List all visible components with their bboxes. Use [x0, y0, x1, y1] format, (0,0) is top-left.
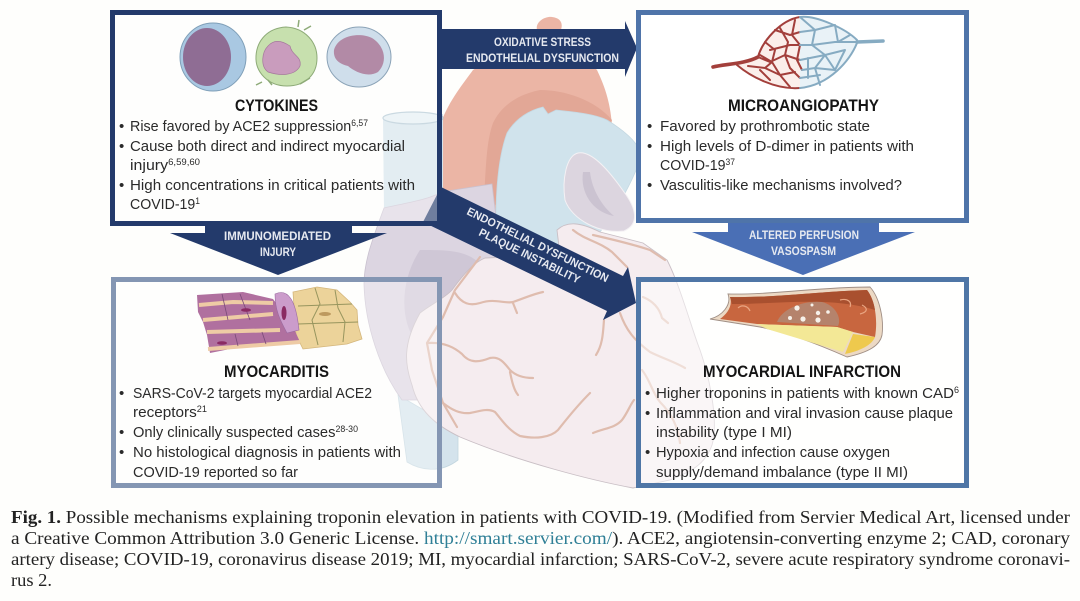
- text: cytokines bullets: 6,59,60: [168, 157, 200, 167]
- text: myocardial infarction bullets: Hypoxia and infection cause oxygen: [656, 444, 890, 461]
- panel: myocardial infarction: [638, 280, 966, 486]
- text: myocardial infarction bullets: •: [645, 405, 650, 422]
- text: myocarditis bullets: receptors: [133, 404, 196, 421]
- heart: superior vena cava: [383, 114, 443, 212]
- heart: ventricles: [407, 224, 714, 488]
- panel: myocarditis: [114, 280, 440, 486]
- text: cytokines bullets: High concentrations in critical patients with: [130, 177, 415, 194]
- icon: capillary bed: [713, 17, 883, 88]
- text: cytokines bullets: COVID-19: [130, 196, 199, 213]
- text: cytokines bullets: •: [119, 177, 124, 194]
- arrow: altered perfusion: ALTERED PERFUSION: [749, 230, 859, 242]
- arrow: endothelial dysfunction: [423, 187, 636, 320]
- text: microangiopathy bullets: COVID-19: [660, 157, 729, 174]
- text: myocardial infarction bullets: 6: [954, 385, 959, 395]
- arrow: endothelial dysfunction: PLAQUE INSTABILITY: [477, 227, 582, 286]
- text: myocarditis bullets: No histological diagnosis in patients with: [133, 444, 401, 461]
- arrow: immunomediated injury: [170, 225, 387, 275]
- heart: coronary arteries: [427, 230, 685, 443]
- text: cytokines bullets: Rise favored by ACE2 suppression: [130, 118, 362, 135]
- text: myocardial infarction bullets: •: [645, 444, 650, 461]
- arrow: endothelial dysfunction: ENDOTHELIAL DYSFUNCTION: [465, 206, 610, 285]
- text: microangiopathy bullets: High levels of D-dimer in patients with: [660, 138, 914, 155]
- panel: cytokines: [112, 12, 440, 224]
- arrow: immunomediated injury: IMMUNOMEDIATED: [224, 231, 331, 243]
- text: microangiopathy bullets: 37: [726, 157, 735, 167]
- text: cytokines bullets: •: [119, 118, 124, 135]
- text: microangiopathy bullets: •: [647, 118, 652, 135]
- heart: aorta: [442, 17, 612, 235]
- text: myocarditis bullets: Only clinically suspected cases: [133, 424, 340, 441]
- text: cytokines bullets: [119, 118, 415, 213]
- heading: myocardial infarction: MYOCARDIAL INFARCTION: [703, 363, 901, 381]
- icon: artery with plaque: [710, 287, 882, 357]
- text: cytokines bullets: Cause both direct and indirect myocardial: [130, 138, 405, 155]
- text: myocardial infarction bullets: Higher troponins in patients with known CAD: [656, 385, 953, 402]
- text: microangiopathy bullets: Favored by prothrombotic state: [660, 118, 870, 135]
- text: myocarditis bullets: •: [119, 385, 124, 402]
- heading: myocarditis: MYOCARDITIS: [224, 363, 329, 381]
- text: myocarditis bullets: COVID-19 reported so far: [133, 464, 298, 481]
- caption: artery disease; COVID-19, coronavirus disease 2019; MI, myocardial infarction; SARS-CoV-2, severe acute respiratory syndrome coronavi-: [11, 549, 1070, 569]
- text: microangiopathy bullets: Vasculitis-like mechanisms involved?: [660, 177, 902, 194]
- text: cytokines bullets: 6,57: [351, 118, 368, 128]
- heart: pulmonary artery: [496, 107, 639, 258]
- heart: right atrium: [364, 184, 500, 400]
- text: myocardial infarction bullets: [645, 385, 959, 481]
- text: microangiopathy bullets: •: [647, 138, 652, 155]
- text: myocardial infarction bullets: •: [645, 385, 650, 402]
- arrow: oxidative stress: OXIDATIVE STRESS: [494, 37, 591, 49]
- caption: [11, 507, 1070, 590]
- text: microangiopathy bullets: [647, 118, 914, 194]
- icon: immune cells: [180, 20, 391, 91]
- text: myocardial infarction bullets: Inflammation and viral invasion cause plaque: [656, 405, 953, 422]
- text: cytokines bullets: 1: [195, 196, 200, 206]
- text: microangiopathy bullets: •: [647, 177, 652, 194]
- text: myocarditis bullets: SARS-CoV-2 targets myocardial ACE2: [133, 385, 372, 402]
- text: myocarditis bullets: 28-30: [335, 424, 358, 434]
- text: myocarditis bullets: •: [119, 444, 124, 461]
- heart illustration: [364, 17, 714, 488]
- text: myocarditis bullets: [119, 385, 401, 481]
- icon: cardiac muscle fibers: [197, 287, 362, 353]
- arrow: oxidative stress: [442, 21, 637, 77]
- heart: inferior vena cava: [398, 395, 458, 469]
- heading: cytokines: CYTOKINES: [235, 97, 318, 115]
- text: myocardial infarction bullets: supply/demand imbalance (type II MI): [656, 464, 908, 481]
- panel: microangiopathy: [638, 12, 966, 220]
- text: cytokines bullets: injury: [130, 157, 166, 174]
- text: cytokines bullets: •: [119, 138, 124, 155]
- arrow: altered perfusion: VASOSPASM: [771, 246, 836, 258]
- text: myocarditis bullets: •: [119, 424, 124, 441]
- text: myocarditis bullets: 21: [197, 404, 207, 414]
- caption: Fig. 1. Possible mechanisms explaining troponin elevation in patients with COVID-19. (Modified from Servier Medical Art, licensed under: [11, 507, 1070, 527]
- caption: a Creative Common Attribution 3.0 Generic License. http://smart.servier.com/ ). ACE2, angiotensin-converting enzyme 2; CAD, coronary: [11, 528, 1070, 548]
- arrow: immunomediated injury: INJURY: [260, 247, 296, 259]
- caption: rus 2.: [11, 570, 52, 590]
- arrow: altered perfusion: [692, 222, 915, 275]
- heading: microangiopathy: MICROANGIOPATHY: [728, 97, 879, 115]
- text: myocardial infarction bullets: instability (type I MI): [656, 424, 792, 441]
- arrow: oxidative stress: ENDOTHELIAL DYSFUNCTION: [466, 53, 619, 65]
- heart: left atrial appendage: [564, 153, 635, 231]
